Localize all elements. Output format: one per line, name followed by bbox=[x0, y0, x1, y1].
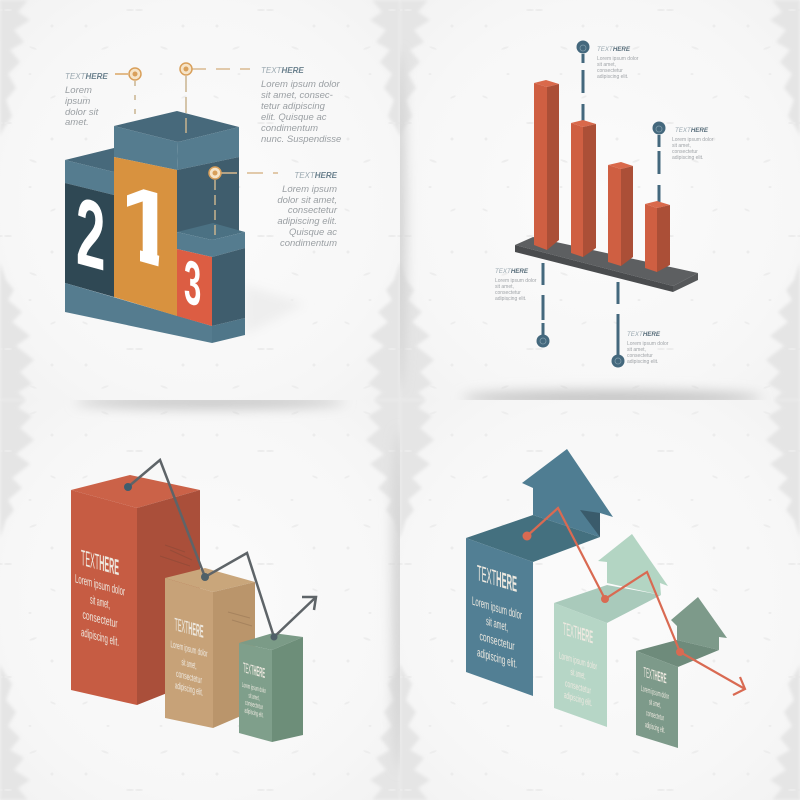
mint panel text bbox=[559, 618, 597, 709]
blue panel text bbox=[472, 560, 522, 671]
trend line arrow bbox=[124, 460, 316, 640]
platform bbox=[515, 237, 698, 292]
text block right: Quisque ac bbox=[289, 227, 337, 238]
number 1: 1 bbox=[118, 159, 177, 294]
podium base bbox=[65, 283, 245, 343]
panel: boxes with line: adipiscing elit. bbox=[244, 707, 264, 720]
connector: lower right bbox=[612, 282, 624, 368]
text block lower left: TEXTHERE bbox=[495, 268, 529, 275]
red box text: consectetur bbox=[83, 607, 117, 631]
blue panel text: adipiscing elit. bbox=[477, 645, 517, 671]
blue arrow tab bbox=[466, 449, 613, 696]
panel: boxes with line bbox=[71, 460, 316, 742]
text block lower right: consectetur bbox=[627, 353, 653, 359]
panel: boxes with line: Lorem ipsum dolor bbox=[170, 639, 208, 660]
panel: podium bbox=[65, 63, 341, 343]
green box bbox=[239, 633, 303, 742]
panel: boxes with line: TEXTHERE bbox=[243, 660, 265, 682]
mint arrow tab bbox=[554, 534, 668, 727]
text block right: TEXTHERE bbox=[294, 171, 338, 180]
blue panel text: sit amet, bbox=[486, 614, 508, 634]
text block middle: Lorem ipsum dolor bbox=[261, 79, 341, 90]
text block lower right bbox=[627, 331, 669, 365]
bar 2 bbox=[571, 120, 596, 257]
text block left: dolor sit bbox=[65, 107, 99, 118]
text block top: adipiscing elit. bbox=[597, 74, 628, 80]
text block middle: nunc. Suspendisse bbox=[261, 134, 341, 145]
text block top: consectetur bbox=[597, 68, 623, 74]
panel: boxes with line: Lorem ipsum dolor bbox=[242, 681, 266, 695]
red box text bbox=[75, 545, 125, 649]
red box text: Lorem ipsum dolor bbox=[75, 571, 125, 599]
green box text: consectetur bbox=[245, 699, 263, 711]
text block lower left: adipiscing elit. bbox=[495, 296, 526, 302]
text block middle: tetur adipiscing bbox=[261, 101, 326, 112]
text block right: dolor sit amet, bbox=[277, 195, 337, 206]
bar 3 bbox=[608, 162, 633, 266]
tan box text: adipiscing elit. bbox=[175, 680, 203, 699]
podium shadow bbox=[248, 292, 290, 326]
podium block 3 bbox=[177, 223, 245, 326]
text block right: consectetur bbox=[672, 149, 698, 155]
text block lower left: consectetur bbox=[495, 290, 521, 296]
text block top: TEXTHERE bbox=[597, 46, 631, 53]
podium block 1 bbox=[114, 111, 239, 316]
text block lower left: sit amet, bbox=[495, 284, 514, 290]
text block left: amet. bbox=[65, 117, 89, 128]
podium block 2 bbox=[65, 148, 114, 297]
text block top bbox=[597, 46, 639, 80]
red box bbox=[71, 475, 200, 705]
tan box text: TEXTHERE bbox=[174, 613, 204, 642]
callout connector middle bbox=[180, 63, 250, 133]
connector: top bbox=[576, 40, 590, 124]
panel: bar chart bbox=[495, 40, 714, 368]
green box text bbox=[242, 660, 266, 720]
blue panel text: TEXTHERE bbox=[477, 560, 517, 597]
text block right: Lorem ipsum bbox=[282, 184, 337, 195]
text block right: Lorem ipsum dolor bbox=[672, 137, 714, 143]
tan box bbox=[165, 568, 255, 728]
text block right: consectetur bbox=[288, 205, 338, 216]
mint panel text: consectetur bbox=[565, 678, 591, 697]
text block right bbox=[672, 127, 714, 161]
panel: folded arrows: Lorem ipsum dolor bbox=[641, 684, 669, 701]
blue panel text: consectetur bbox=[480, 629, 514, 653]
panel: folded arrows bbox=[466, 449, 745, 748]
text block lower left: Lorem ipsum dolor bbox=[495, 278, 537, 284]
mint panel text: sit amet, bbox=[570, 667, 586, 682]
callout connector right bbox=[209, 167, 278, 236]
text block lower right: Lorem ipsum dolor bbox=[627, 341, 669, 347]
sage arrow tab bbox=[636, 597, 727, 748]
callout connector left bbox=[115, 68, 141, 120]
text block right: sit amet, bbox=[672, 143, 691, 149]
number 3: 3 bbox=[184, 247, 201, 320]
text block middle: condimentum bbox=[261, 123, 318, 134]
text block left: TEXTHERE bbox=[65, 72, 108, 81]
number 2: 2 bbox=[76, 176, 105, 292]
blue panel text: Lorem ipsum dolor bbox=[472, 594, 522, 622]
text block left: Lorem bbox=[65, 85, 92, 96]
tan box text: sit amet, bbox=[182, 657, 196, 672]
bar 1 bbox=[534, 80, 559, 250]
mint panel text: TEXTHERE bbox=[563, 618, 593, 647]
text block lower right: sit amet, bbox=[627, 347, 646, 353]
text block right bbox=[277, 171, 338, 249]
panel: folded arrows: adipiscing elit. bbox=[645, 720, 665, 735]
text block right: adipiscing elit. bbox=[672, 155, 703, 161]
trend line arrow bbox=[522, 508, 745, 695]
text block middle bbox=[261, 66, 341, 145]
text block right: adipiscing elit. bbox=[277, 216, 337, 227]
red box text: TEXTHERE bbox=[81, 545, 119, 580]
mint panel text: adipiscing elit. bbox=[564, 690, 592, 709]
text block right: TEXTHERE bbox=[675, 127, 709, 134]
text block middle: TEXTHERE bbox=[261, 66, 304, 75]
sage panel text: TEXTHERE bbox=[644, 665, 667, 687]
text block lower left bbox=[495, 268, 537, 302]
red box text: adipiscing elit. bbox=[81, 625, 119, 649]
text block top: sit amet, bbox=[597, 62, 616, 68]
text block top: Lorem ipsum dolor bbox=[597, 56, 639, 62]
red box text: sit amet, bbox=[90, 592, 110, 612]
connector: lower left bbox=[536, 263, 550, 348]
bar 4 bbox=[645, 201, 670, 272]
text block middle: elit. Quisque ac bbox=[261, 112, 327, 123]
panel: folded arrows: Lorem ipsum dolor bbox=[559, 650, 597, 673]
text block right: condimentum bbox=[280, 238, 337, 249]
sage panel text: consectetur bbox=[646, 708, 664, 723]
sage panel text: sit amet, bbox=[649, 697, 661, 710]
text block left: ipsum bbox=[65, 96, 90, 107]
tan box text bbox=[170, 613, 208, 699]
text block lower right: TEXTHERE bbox=[627, 331, 661, 338]
green box text: sit amet, bbox=[248, 692, 260, 702]
sage panel text bbox=[641, 665, 669, 735]
text block middle: sit amet, consec- bbox=[261, 90, 333, 101]
tan box text: consectetur bbox=[176, 669, 202, 687]
text block left bbox=[65, 72, 108, 128]
connector: right bbox=[652, 122, 666, 205]
text block lower right: adipiscing elit. bbox=[627, 359, 658, 365]
